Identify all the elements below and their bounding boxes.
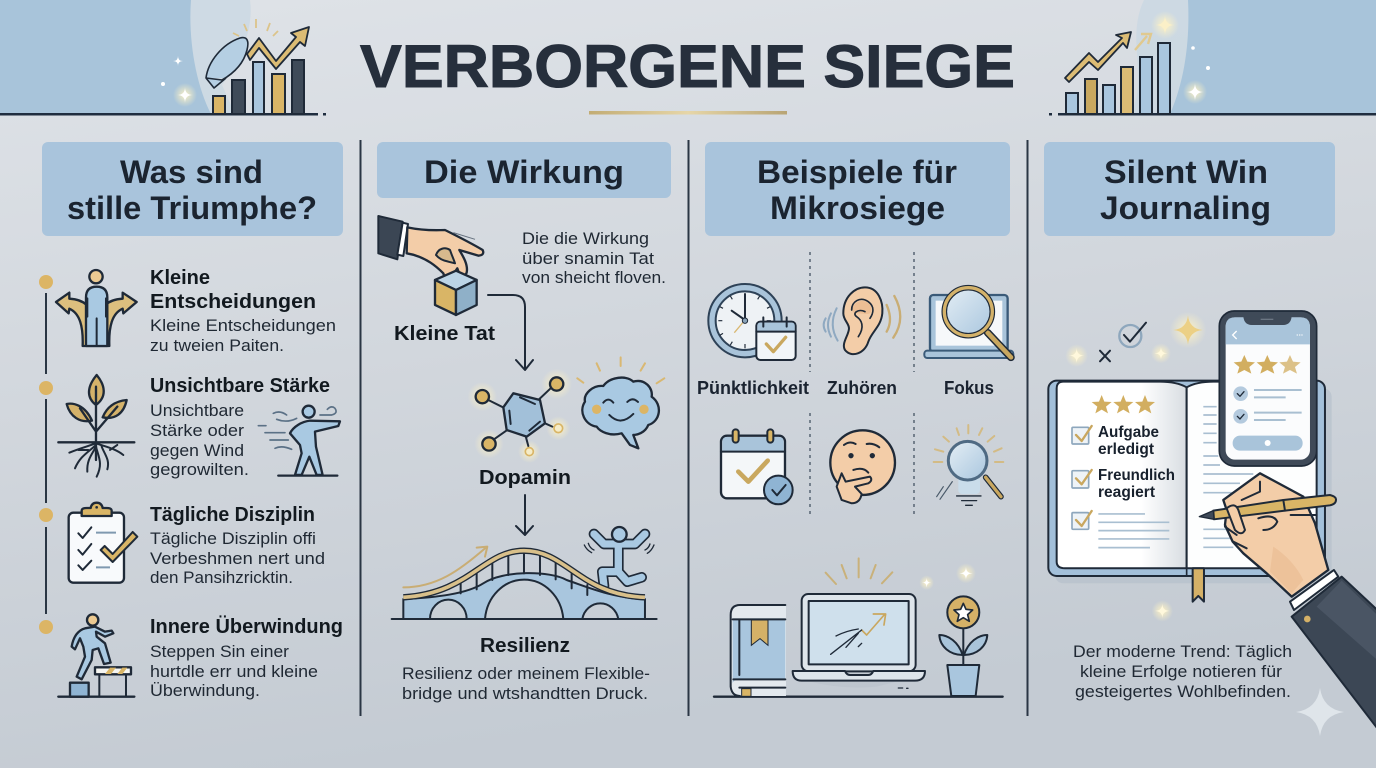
header band — [0, 0, 1376, 116]
text: intro: über snamin Tat — [522, 250, 654, 268]
text: Unsichtbare Stärke: Unsichtbare Stärke — [150, 375, 330, 397]
icon: ear — [824, 287, 900, 354]
icon: desk with book, laptop and plant — [714, 558, 1003, 697]
panel heading: Die Wirkung — [377, 142, 671, 198]
text: Innere Überwindung: Überwindung. — [150, 682, 260, 700]
icon: magnifier with bulb — [934, 425, 1003, 505]
text: journal entries: Aufgabe — [1098, 424, 1159, 441]
text: intro: von sheicht floven. — [522, 269, 666, 287]
icon: thinking face — [830, 430, 895, 503]
text: Resilienz: Resilienz — [480, 635, 570, 657]
icon: hand placing cube — [378, 216, 483, 315]
panel heading: Was sind stille Triumphe — [42, 142, 343, 236]
icon: clipboard — [69, 503, 137, 583]
panel heading: Die Wirkung: Die Wirkung — [424, 154, 624, 190]
text: Kleine Tat: Kleine Tat — [394, 323, 495, 345]
text: Unsichtbare Stärke — [150, 375, 330, 479]
text: journal entries — [1098, 424, 1175, 501]
text: Dopamin: Dopamin — [479, 467, 571, 489]
icon: bridge with jumping person — [392, 527, 657, 619]
panel heading: Beispiele für Mikrosiege: Beispiele für — [757, 154, 957, 190]
panel: Die Wirkung flow — [378, 216, 666, 703]
text: intro: Die die Wirkung — [522, 230, 649, 248]
icon: calendar with check — [721, 429, 793, 504]
text: modern trend caption — [1073, 643, 1292, 701]
panel heading: Silent Win Journaling: Journaling — [1100, 190, 1271, 226]
text: Zuhören: Zuhören — [827, 378, 897, 398]
timeline — [39, 275, 53, 634]
text: Unsichtbare Stärke: gegen Wind — [150, 442, 244, 460]
text: modern trend caption: gesteigertes Wohlbefinden. — [1075, 683, 1291, 701]
icon: left header chart with hand — [161, 19, 309, 114]
title underline — [589, 111, 787, 114]
panel: Beispiele für Mikrosiege — [697, 252, 1013, 697]
icon: floating sparkles and check — [1065, 312, 1206, 622]
text: Kleine Entscheidungen: Entscheidungen — [150, 291, 316, 313]
panel heading: Silent Win Journaling — [1044, 142, 1335, 236]
text: Resilienz: Resilienz oder meinem Flexible- — [402, 665, 650, 683]
text: Innere Überwindung: Innere Überwindung — [150, 615, 343, 638]
icon: clock with calendar — [708, 284, 796, 360]
icon: laptop with magnifier — [924, 288, 1013, 358]
icon: plant with roots — [58, 375, 134, 477]
arrow: Kleine Tat to Dopamin — [488, 295, 533, 370]
text: journal entries: erledigt — [1098, 441, 1155, 458]
text: Unsichtbare Stärke: Unsichtbare — [150, 402, 244, 420]
text: journal entries: Freundlich — [1098, 467, 1175, 484]
panel heading: Beispiele für Mikrosiege — [705, 142, 1010, 236]
arrow: Dopamin to Resilienz — [516, 495, 533, 535]
text: Kleine Entscheidungen — [150, 267, 336, 355]
text: Fokus: Fokus — [944, 378, 994, 398]
text: Tägliche Disziplin: Tägliche Disziplin offi — [150, 530, 316, 548]
icon: person against wind — [258, 406, 340, 476]
text: modern trend caption: Der moderne Trend: Täglich — [1073, 643, 1292, 661]
icon: right header chart — [1065, 11, 1210, 114]
text: Innere Überwindung: Steppen Sin einer — [150, 643, 290, 661]
text: Kleine Entscheidungen: Kleine Entscheidungen — [150, 317, 336, 335]
text: modern trend caption: kleine Erfolge notieren für — [1080, 663, 1283, 681]
icon: person at crossroads — [56, 270, 137, 346]
panel heading: Silent Win Journaling: Silent Win — [1104, 154, 1268, 190]
icon: happy brain — [577, 357, 664, 448]
text: Tägliche Disziplin: den Pansihzricktin. — [150, 569, 293, 587]
text: Tägliche Disziplin: Tägliche Disziplin — [150, 504, 315, 526]
text: intro — [522, 230, 666, 287]
title: VERBORGENE SIEGE — [360, 33, 1015, 100]
text: Unsichtbare Stärke: gegrowilten. — [150, 461, 249, 479]
icon: hand writing with pen — [1199, 473, 1336, 597]
text: Unsichtbare Stärke: Stärke oder — [150, 422, 245, 440]
text: Resilienz — [402, 635, 650, 703]
panel heading: Was sind stille Triumphe: stille Triumphe? — [67, 190, 317, 226]
text: Tägliche Disziplin: Verbeshmen nert und — [150, 550, 325, 568]
text: Innere Überwindung — [150, 615, 343, 700]
text: Pünktlichkeit: Pünktlichkeit — [697, 378, 809, 398]
icon: corner sparkle — [1296, 688, 1344, 736]
text: Tägliche Disziplin — [150, 504, 325, 587]
panel: Silent Win Journaling — [1048, 311, 1376, 736]
text: Kleine Entscheidungen: Kleine — [150, 267, 210, 289]
icon: smartphone — [1219, 311, 1317, 466]
icon: dopamine molecule — [468, 369, 572, 463]
text: Innere Überwindung: hurtdle err und kleine — [150, 663, 318, 681]
icon: person stepping over hurdle — [58, 614, 134, 697]
text: Kleine Entscheidungen: zu tweien Paiten. — [150, 337, 284, 355]
panel: was sind stille Triumphe timeline — [39, 267, 343, 700]
icon: suit sleeve — [1290, 570, 1376, 728]
text: journal entries: reagiert — [1098, 484, 1156, 501]
icon: open journal — [1048, 381, 1332, 602]
panel heading: Beispiele für Mikrosiege: Mikrosiege — [770, 190, 945, 226]
panel heading: Was sind stille Triumphe: Was sind — [120, 154, 263, 190]
text: Resilienz: bridge und wtshandtten Druck. — [402, 685, 648, 703]
